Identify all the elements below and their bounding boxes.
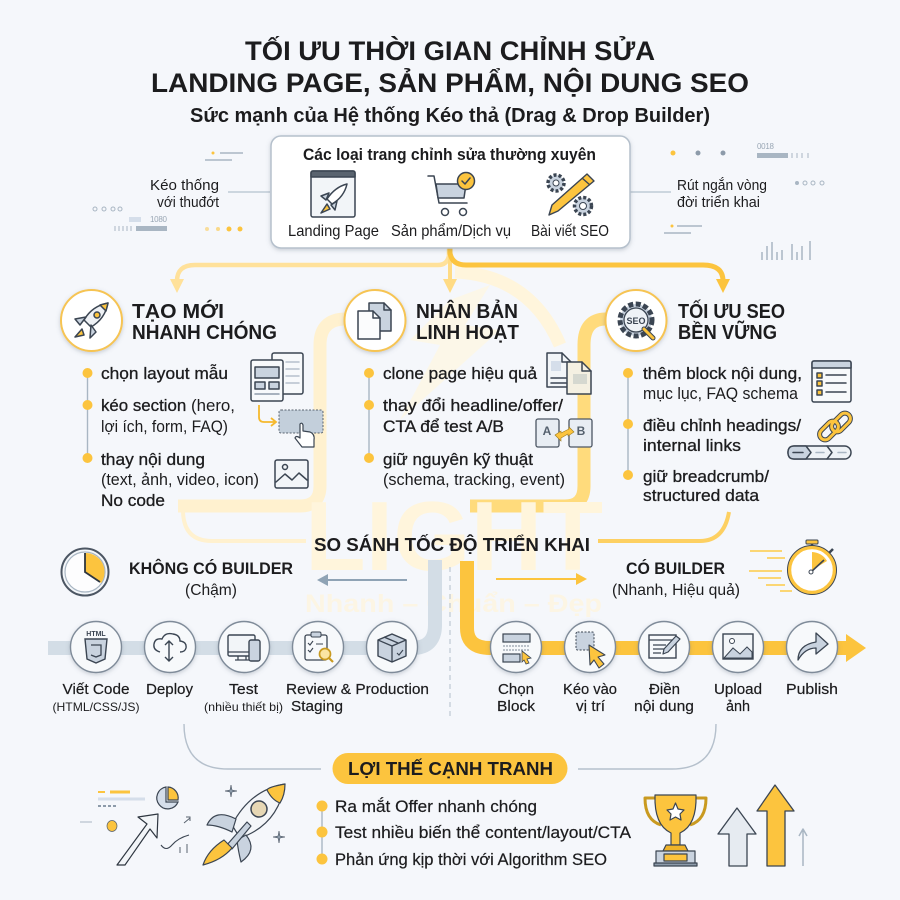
icon: layout templates (251, 353, 303, 401)
icon: A/B test (536, 419, 592, 447)
text: advantages: Phản ứng kịp thời với Algorithm SEO (335, 851, 607, 869)
heading: (Chậm) (185, 582, 237, 599)
text: bullets (643, 365, 802, 505)
side note: left: với thuđớt (157, 194, 220, 211)
label: products: Sản phẩm/Dịch vụ (391, 222, 511, 240)
bullet timeline (623, 368, 633, 480)
subtitle: Sức mạnh của Hệ thống Kéo thả (Drag & Drop Builder) (190, 105, 710, 127)
icon: shopping cart (428, 172, 474, 216)
step: choose block (490, 622, 542, 715)
heading (416, 299, 519, 344)
icon: pencil and gears (548, 174, 594, 215)
side note: right (677, 177, 767, 211)
text: bullets: điều chỉnh headings/ (643, 417, 801, 435)
icon: table of contents window (812, 361, 851, 402)
panel: flexible cloning (344, 290, 592, 489)
step: publish (786, 622, 838, 698)
heading (129, 559, 293, 599)
track: fast path with arrowhead (467, 561, 866, 662)
watermark: logo and connecting bands: LIGHT (305, 481, 603, 591)
icon: breadcrumb (788, 446, 851, 459)
step: fill content: Điền (649, 681, 680, 698)
panel: create new quickly (61, 290, 323, 510)
step: write code: Viết Code (62, 681, 130, 698)
heading: LINH HOẠT (416, 322, 519, 344)
heading: TỐI ƯU SEO (678, 299, 785, 323)
step: write code: (HTML/CSS/JS) (52, 700, 140, 714)
watermark: logo and connecting bands (178, 272, 729, 618)
step: test (204, 622, 283, 714)
heading pill (332, 753, 568, 784)
step: review and staging: Staging (291, 698, 343, 715)
text: advantages (335, 797, 631, 869)
side note: left (150, 177, 220, 211)
text: bullets: clone page hiệu quả (383, 365, 538, 383)
step: upload image: ảnh (726, 698, 750, 715)
step: test: Test (229, 681, 259, 698)
heading: TẠO MỚI (132, 299, 224, 323)
illustration: growth arrow and chart (80, 787, 190, 865)
text: bullets: structured data (643, 487, 760, 505)
illustration: launching rocket (203, 784, 285, 865)
title (151, 34, 749, 98)
panel: with builder (467, 540, 866, 715)
icon: slow clock (62, 548, 108, 596)
text: bullets (383, 365, 565, 489)
bullet timeline (82, 368, 92, 463)
track: slow path (48, 560, 435, 648)
text: bullets: (schema, tracking, event) (383, 471, 565, 489)
icon: cloned documents (547, 353, 591, 394)
panel: durable SEO optimization (606, 290, 853, 505)
step: write code: HTML (86, 631, 106, 638)
step: review and staging: Review & Production (286, 681, 429, 698)
flow arrows from card to pillars (170, 248, 730, 293)
bullet timeline (364, 368, 374, 463)
heading: KHÔNG CÓ BUILDER (129, 559, 293, 578)
step: choose block: Block (497, 698, 536, 715)
side note: right: đời triển khai (677, 194, 760, 211)
step: deploy: Deploy (146, 681, 193, 698)
step: drag into place: vị trí (576, 698, 606, 715)
bracket connecting comparison to advantages (184, 724, 716, 769)
heading: CÓ BUILDER (626, 559, 725, 578)
step: deploy (144, 622, 196, 698)
icon: drag section (259, 405, 323, 447)
title: TỐI ƯU THỜI GIAN CHỈNH SỬA (245, 34, 655, 66)
step: write code (52, 622, 140, 714)
panel: without builder (48, 548, 435, 715)
step: fill content (634, 622, 694, 715)
text: bullets: (text, ảnh, video, icon) (101, 471, 259, 489)
step: choose block: Chọn (498, 681, 534, 698)
step: production (366, 622, 418, 672)
text: bullets: internal links (643, 437, 741, 455)
icon: rocket badge (61, 290, 122, 351)
text: bullets: thêm block nội dung, (643, 365, 802, 383)
text: bullets: thay nội dung (101, 451, 205, 469)
step: drag into place: Kéo vào (563, 681, 617, 698)
text: bullets: thay đổi headline/offer/ (383, 397, 563, 415)
bullet timeline (316, 800, 328, 864)
text: bullets (101, 364, 259, 510)
text: bullets: kéo section (hero, (101, 397, 235, 415)
icon: fast stopwatch (749, 540, 836, 594)
panel: page types card (271, 136, 630, 248)
step: test: (nhiều thiết bị) (204, 700, 283, 714)
icon: A/B test: B (577, 424, 586, 438)
side note: right: Rút ngắn vòng (677, 177, 767, 194)
step: upload image (712, 622, 764, 715)
icon: chain link (817, 411, 853, 442)
text: bullets: mục lục, FAQ schema (643, 385, 799, 403)
illustration: growth arrows (718, 785, 807, 866)
icon: SEO gear badge: SEO (626, 316, 646, 326)
text: bullets: giữ breadcrumb/ (643, 468, 769, 486)
watermark: logo and connecting bands: Nhanh – Chuẩn – Đẹp (305, 590, 602, 618)
text: advantages: Test nhiều biến thể content/layout/CTA (335, 824, 631, 842)
illustration: trophy (645, 795, 706, 866)
decorative tech marks: 0018 (757, 142, 775, 151)
arrow: fast direction (496, 573, 587, 585)
icon: image (275, 460, 308, 488)
panel: competitive advantage (80, 753, 807, 869)
divider (449, 567, 451, 720)
step: publish: Publish (786, 681, 838, 698)
heading: (Nhanh, Hiệu quả) (612, 582, 740, 599)
text: advantages: Ra mắt Offer nhanh chóng (335, 797, 537, 816)
text: bullets: No code (101, 492, 165, 510)
step: drag into place (563, 622, 617, 715)
side note: left: Kéo thống (150, 177, 219, 194)
step: upload image: Upload (714, 681, 762, 698)
section heading: speed comparison: SO SÁNH TỐC ĐỘ TRIỂN KHAI (314, 534, 590, 555)
heading: BỀN VỮNG (678, 320, 777, 344)
text: bullets: CTA để test A/B (383, 418, 504, 436)
step: review and staging (286, 622, 429, 715)
arrow: slow direction (317, 574, 407, 586)
text: bullets: giữ nguyên kỹ thuật (383, 451, 533, 469)
card heading: Các loại trang chỉnh sửa thường xuyên (303, 145, 596, 164)
text: bullets: lợi ích, form, FAQ) (101, 418, 228, 436)
icon: landing page rocket window (311, 171, 355, 217)
heading (678, 299, 785, 344)
heading: NHÂN BẢN (416, 299, 518, 323)
heading pill: LỢI THẾ CẠNH TRANH (348, 758, 553, 779)
icon: documents badge (344, 290, 406, 351)
text: bullets: chọn layout mẫu (101, 364, 228, 383)
title: LANDING PAGE, SẢN PHẨM, NỘI DUNG SEO (151, 66, 749, 98)
heading (132, 299, 277, 344)
heading (612, 559, 740, 599)
icon: A/B test: A (543, 424, 552, 438)
icon: SEO gear badge (606, 290, 666, 351)
heading: NHANH CHÓNG (132, 320, 277, 344)
decorative tech marks (93, 142, 824, 260)
step: fill content: nội dung (634, 698, 694, 715)
decorative tech marks: 1080 (150, 215, 168, 224)
label: landing page: Landing Page (288, 223, 379, 240)
label: SEO articles: Bài viết SEO (531, 223, 609, 240)
